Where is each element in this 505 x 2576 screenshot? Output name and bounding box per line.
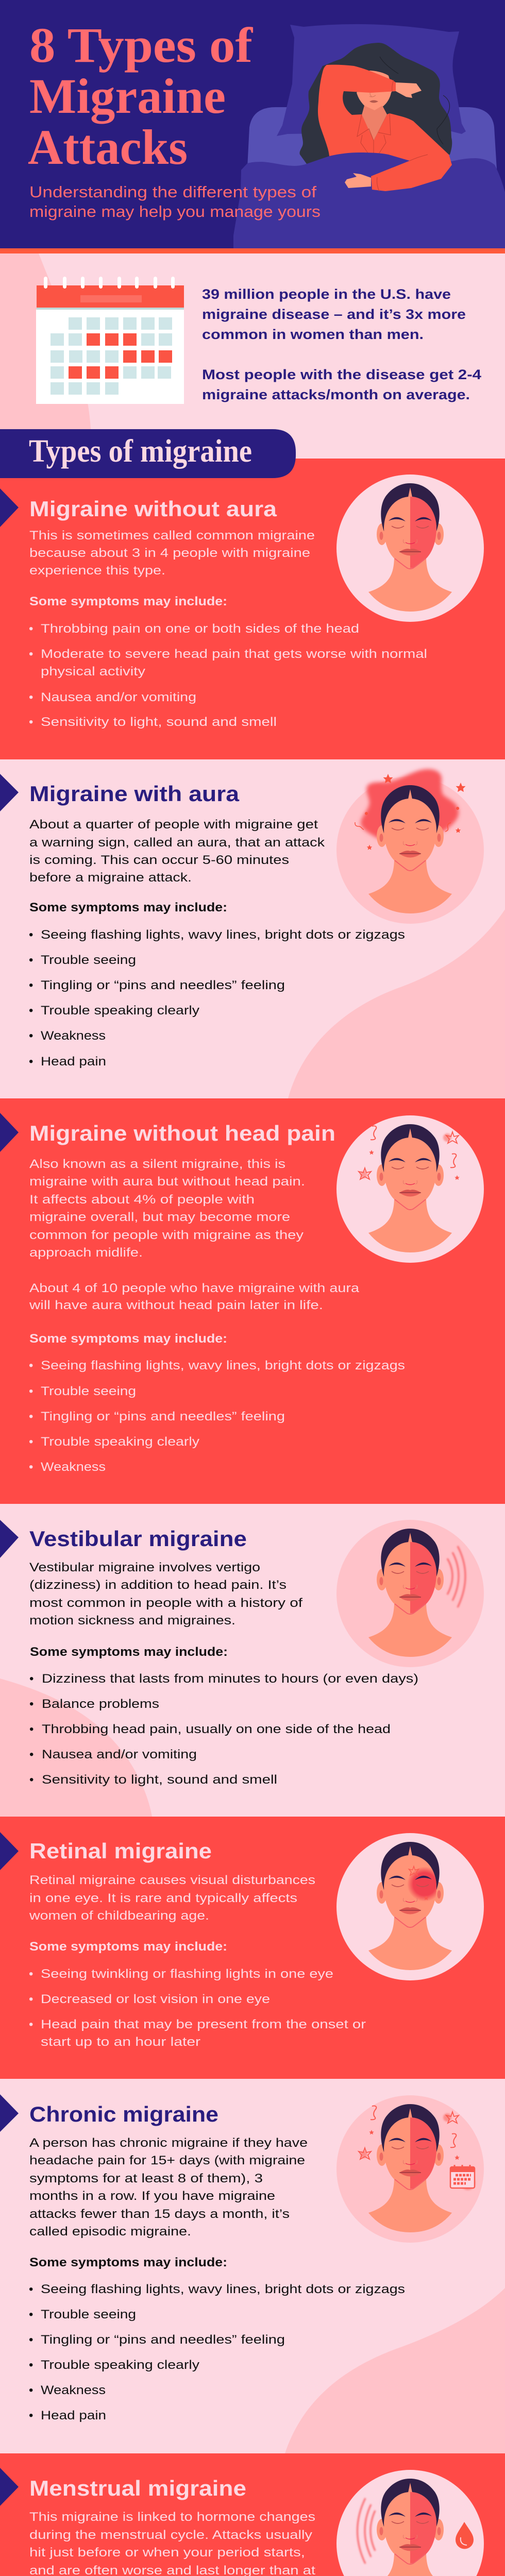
symptoms list: • bbox=[29, 1410, 33, 1423]
symptoms list: Trouble speaking clearly bbox=[41, 1004, 199, 1018]
illustration: face with visual aura symbols bbox=[336, 1115, 484, 1263]
symptoms heading: Some symptoms may include: bbox=[30, 1645, 228, 1659]
description: Vestibular migraine involves vertigo bbox=[29, 1561, 260, 1574]
symptoms list: Throbbing pain on one or both sides of the head bbox=[41, 622, 359, 636]
description: will have aura without head pain later in life. bbox=[29, 1298, 323, 1312]
symptoms list: • bbox=[29, 2358, 33, 2372]
chevron bbox=[0, 2094, 19, 2132]
title bbox=[28, 18, 253, 175]
subtitle: Understanding the different types of bbox=[29, 183, 316, 201]
text: migraine statistics: migraine attacks/month on average. bbox=[202, 387, 470, 402]
symptoms list: • bbox=[29, 647, 33, 661]
symptoms list: Throbbing head pain, usually on one side of the head bbox=[42, 1722, 391, 1736]
heading: Migraine without aura bbox=[29, 497, 277, 521]
description bbox=[29, 2136, 308, 2239]
symptoms list bbox=[29, 1672, 418, 1787]
description: is coming. This can occur 5-60 minutes bbox=[29, 853, 289, 867]
symptoms list: • bbox=[29, 2018, 33, 2031]
symptoms list: • bbox=[29, 690, 33, 704]
symptoms list: • bbox=[29, 1748, 33, 1761]
symptoms list bbox=[29, 1359, 405, 1474]
symptoms list: physical activity bbox=[41, 665, 145, 679]
chevron bbox=[0, 1832, 19, 1870]
heading: Menstrual migraine bbox=[29, 2476, 246, 2500]
symptoms list: • bbox=[29, 2282, 33, 2296]
symptoms list: Seeing twinkling or flashing lights in one eye bbox=[41, 1967, 333, 1981]
symptoms list: Seeing flashing lights, wavy lines, bright dots or zigzags bbox=[41, 2282, 405, 2296]
symptoms list: Weakness bbox=[41, 2383, 106, 2397]
chevron bbox=[0, 1113, 19, 1152]
symptoms list: Trouble speaking clearly bbox=[41, 2358, 199, 2372]
symptoms list: Nausea and/or vomiting bbox=[42, 1748, 197, 1761]
symptoms list: Dizziness that lasts from minutes to hours (or even days) bbox=[42, 1672, 418, 1686]
panel: statistics bbox=[0, 253, 505, 459]
description bbox=[29, 1157, 360, 1312]
text: migraine statistics: common in women than men. bbox=[202, 327, 424, 342]
description: motion sickness and migraines. bbox=[29, 1614, 235, 1628]
chevron bbox=[0, 774, 19, 811]
symptoms list: • bbox=[29, 1460, 33, 1474]
text: migraine statistics: migraine disease – and it’s 3x more bbox=[202, 307, 466, 322]
symptoms list: Head pain bbox=[41, 2409, 106, 2422]
description: About a quarter of people with migraine get bbox=[29, 818, 318, 832]
symptoms list: Decreased or lost vision in one eye bbox=[41, 1992, 270, 2006]
symptoms list: • bbox=[29, 1029, 33, 1043]
description: women of childbearing age. bbox=[29, 1909, 209, 1923]
illustration: face with calendar and aura symbols bbox=[336, 2095, 484, 2243]
symptoms list: Trouble seeing bbox=[41, 1384, 136, 1398]
symptoms heading: Some symptoms may include: bbox=[29, 901, 227, 914]
description: experience this type. bbox=[29, 564, 165, 578]
description: a warning sign, called an aura, that an attack bbox=[29, 836, 325, 850]
symptoms list bbox=[29, 928, 405, 1069]
symptoms list: • bbox=[29, 1773, 33, 1787]
description: before a migraine attack. bbox=[29, 871, 192, 885]
heading: Vestibular migraine bbox=[29, 1527, 247, 1551]
description: This migraine is linked to hormone changes bbox=[29, 2510, 315, 2524]
symptoms list: Trouble seeing bbox=[41, 953, 136, 967]
symptoms list: • bbox=[29, 1435, 33, 1449]
description: (dizziness) in addition to head pain. It’s bbox=[29, 1578, 287, 1592]
heading: Migraine without head pain bbox=[29, 1121, 335, 1145]
symptoms list: • bbox=[29, 978, 33, 992]
panel: header bbox=[0, 0, 505, 248]
panel: menstrual migraine bbox=[0, 2453, 505, 2576]
description: migraine overall, but may become more bbox=[29, 1210, 290, 1224]
description bbox=[29, 2510, 315, 2576]
symptoms list: Nausea and/or vomiting bbox=[41, 690, 196, 704]
symptoms list: Trouble speaking clearly bbox=[41, 1435, 199, 1449]
symptoms list: • bbox=[29, 1992, 33, 2006]
symptoms list: Sensitivity to light, sound and smell bbox=[41, 715, 277, 729]
symptoms list: • bbox=[29, 2308, 33, 2321]
symptoms list: • bbox=[29, 1967, 33, 1981]
symptoms heading: Some symptoms may include: bbox=[29, 1332, 227, 1346]
panel: chronic migraine bbox=[0, 2079, 505, 2453]
description bbox=[29, 529, 315, 578]
symptoms list: Tingling or “pins and needles” feeling bbox=[41, 2333, 285, 2347]
symptoms list: • bbox=[29, 928, 33, 942]
symptoms list: • bbox=[29, 953, 33, 967]
symptoms list: • bbox=[29, 1055, 33, 1069]
text: migraine statistics bbox=[202, 286, 481, 402]
description: symptoms for at least 8 of them), 3 bbox=[29, 2172, 263, 2185]
panel: retinal migraine bbox=[0, 1817, 505, 2079]
text: migraine statistics: 39 million people in the U.S. have bbox=[202, 286, 451, 302]
description: called episodic migraine. bbox=[29, 2225, 191, 2239]
symptoms list: Tingling or “pins and needles” feeling bbox=[41, 1410, 285, 1423]
description: attacks fewer than 15 days a month, it’s bbox=[29, 2207, 290, 2221]
description: during the menstrual cycle. Attacks usually bbox=[29, 2528, 312, 2542]
illustration: face with sound waves bbox=[336, 1520, 484, 1667]
chevron bbox=[0, 1520, 19, 1558]
title: 8 Types of bbox=[29, 18, 253, 73]
text: migraine statistics: Most people with the disease get 2-4 bbox=[202, 367, 481, 382]
symptoms heading: Some symptoms may include: bbox=[29, 595, 227, 608]
symptoms heading: Some symptoms may include: bbox=[29, 1940, 227, 1954]
panel: vestibular migraine bbox=[0, 1504, 505, 1817]
symptoms list: • bbox=[29, 2333, 33, 2347]
symptoms list: • bbox=[29, 1004, 33, 1018]
symptoms list: • bbox=[29, 2383, 33, 2397]
description: hit just before or when your period starts, bbox=[29, 2546, 305, 2560]
description: because about 3 in 4 people with migraine bbox=[29, 546, 310, 560]
description: months in a row. If you have migraine bbox=[29, 2189, 275, 2203]
symptoms list: Trouble seeing bbox=[41, 2308, 136, 2321]
symptoms list: Balance problems bbox=[42, 1697, 159, 1711]
description: A person has chronic migraine if they have bbox=[29, 2136, 308, 2150]
panel: migraine with aura bbox=[0, 759, 505, 1098]
description: Also known as a silent migraine, this is bbox=[29, 1157, 285, 1171]
symptoms list: • bbox=[29, 715, 33, 729]
subtitle bbox=[29, 183, 321, 221]
illustration: face with waves and blood drop bbox=[336, 2470, 484, 2576]
illustration: woman in bed with migraine bbox=[233, 24, 505, 248]
symptoms list bbox=[29, 1967, 366, 2049]
panel: migraine without aura bbox=[0, 459, 505, 759]
symptoms heading: Some symptoms may include: bbox=[29, 2256, 227, 2269]
symptoms list: • bbox=[29, 1359, 33, 1372]
symptoms list: Head pain that may be present from the onset or bbox=[41, 2018, 366, 2031]
description: most common in people with a history of bbox=[29, 1596, 302, 1610]
symptoms list: • bbox=[29, 1722, 33, 1736]
description: This is sometimes called common migraine bbox=[29, 529, 315, 543]
symptoms list bbox=[29, 622, 427, 729]
symptoms list: Weakness bbox=[41, 1460, 106, 1474]
description: in one eye. It is rare and typically affects bbox=[29, 1891, 297, 1905]
banner: types of migraine: Types of migraine bbox=[29, 434, 252, 469]
heading: Retinal migraine bbox=[29, 1839, 212, 1863]
symptoms list: • bbox=[29, 1672, 33, 1686]
title: Attacks bbox=[28, 120, 188, 175]
illustration: face with one-eye pain bbox=[336, 1833, 484, 1980]
panel: migraine without head pain bbox=[0, 1098, 505, 1504]
symptoms list: Moderate to severe head pain that gets worse with normal bbox=[41, 647, 427, 661]
banner: types of migraine bbox=[0, 429, 296, 478]
symptoms list bbox=[29, 2282, 405, 2422]
description: migraine with aura but without head pain. bbox=[29, 1175, 305, 1189]
title: Migraine bbox=[29, 69, 226, 124]
description: headache pain for 15+ days (with migraine bbox=[29, 2154, 305, 2167]
symptoms list: Seeing flashing lights, wavy lines, bright dots or zigzags bbox=[41, 928, 405, 942]
symptoms list: start up to an hour later bbox=[41, 2035, 200, 2049]
heading: Chronic migraine bbox=[29, 2102, 218, 2126]
description: Retinal migraine causes visual disturbances bbox=[29, 1873, 315, 1887]
symptoms list: • bbox=[29, 2409, 33, 2422]
symptoms list: Tingling or “pins and needles” feeling bbox=[41, 978, 285, 992]
description: approach midlife. bbox=[29, 1246, 143, 1260]
description bbox=[29, 1873, 315, 1923]
icon: calendar bbox=[36, 277, 184, 404]
symptoms list: Seeing flashing lights, wavy lines, bright dots or zigzags bbox=[41, 1359, 405, 1372]
description: common for people with migraine as they bbox=[29, 1228, 304, 1242]
heading: Migraine with aura bbox=[29, 782, 240, 806]
symptoms list: Head pain bbox=[41, 1055, 106, 1069]
symptoms list: Weakness bbox=[41, 1029, 106, 1043]
illustration: face with pain on one side bbox=[336, 474, 484, 622]
chevron bbox=[0, 2468, 19, 2506]
symptoms list: • bbox=[29, 1384, 33, 1398]
description: About 4 of 10 people who have migraine with aura bbox=[29, 1281, 360, 1295]
description bbox=[29, 1561, 302, 1628]
description bbox=[29, 818, 325, 885]
symptoms list: • bbox=[29, 622, 33, 636]
symptoms list: • bbox=[29, 1697, 33, 1711]
chevron bbox=[0, 488, 19, 527]
symptoms list: Sensitivity to light, sound and smell bbox=[42, 1773, 277, 1787]
illustration: face with aura bbox=[336, 769, 484, 924]
subtitle: migraine may help you manage yours bbox=[29, 202, 321, 221]
description: It affects about 4% of people with bbox=[29, 1193, 255, 1207]
